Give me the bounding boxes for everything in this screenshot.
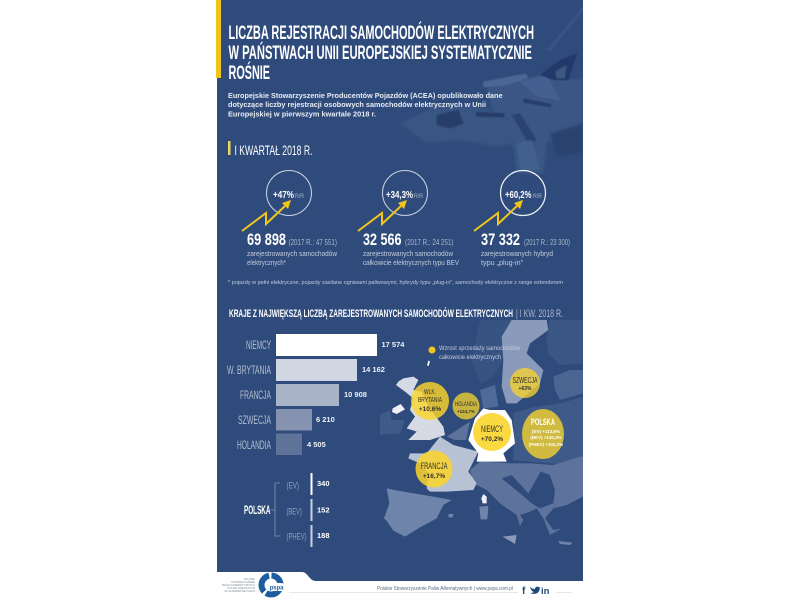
- background panel: [217, 0, 583, 600]
- bubble: Poland: (EV) +113,8%: [532, 429, 560, 434]
- poland figures: 152: [317, 506, 330, 514]
- bubble: Poland: (PHEV) +102,2%: [529, 442, 563, 447]
- logo: PSPA: [222, 576, 285, 594]
- intro text: Europejskie Stowarzyszenie Producentów Pojazdów (ACEA) opublikowało dane: [228, 91, 502, 100]
- stat: BEV: [358, 170, 459, 267]
- section heading: I kwartał: I KWARTAŁ 2018 R.: [234, 143, 312, 158]
- poland figures: (PHEV): [286, 532, 306, 542]
- intro text: Europejskiej w pierwszym kwartale 2018 r.: [228, 110, 376, 118]
- bubble: UK: BRYTANIA: [418, 395, 442, 404]
- map legend: całkowicie elektrycznych: [439, 354, 501, 361]
- bubble: France: [416, 450, 452, 488]
- bubble: Germany: [473, 413, 511, 451]
- accent bar: [216, 0, 221, 78]
- logo: PSPA: pspa: [269, 586, 284, 592]
- bubble: Sweden: +63%: [519, 386, 532, 392]
- stat: all electric: +47%: [273, 189, 295, 201]
- stat: BEV: R/R: [414, 193, 423, 200]
- bubble: UK: WLK.: [424, 387, 436, 396]
- stat: plug-in: (2017 R.: 23 300): [524, 238, 570, 247]
- logo: PSPA: POLSKIE: [244, 577, 255, 581]
- poland figures: 188: [317, 531, 330, 540]
- poland figures: (BEV): [286, 506, 302, 518]
- stat: all electric: 69 898: [247, 230, 286, 249]
- footer: [217, 572, 583, 600]
- bubble: Poland: [522, 409, 564, 459]
- title: W PAŃSTWACH UNII EUROPEJSKIEJ SYSTEMATYCZNIE: [228, 41, 532, 64]
- section heading: I kwartał: [228, 141, 312, 158]
- bubble: Germany: NIEMCY: [481, 424, 503, 435]
- map legend: Wzrost sprzedaży samochodów: [439, 345, 520, 352]
- bubble: Netherlands: [452, 392, 480, 420]
- map legend: [428, 345, 520, 361]
- bar chart: 4 505: [307, 440, 326, 449]
- bubble: UK: +10,6%: [419, 406, 441, 413]
- bar chart: [227, 334, 405, 455]
- stat: all electric: R/R: [295, 193, 304, 200]
- stat: plug-in: typu „plug-in”: [481, 260, 524, 267]
- logo: PSPA: POLISH ASSOCIATION: [227, 586, 255, 590]
- bar chart: SZWECJA: [238, 413, 271, 427]
- heading period: | I KW. 2018 R.: [516, 308, 563, 320]
- poland figures: 340: [317, 479, 330, 488]
- bubble: France: FRANCJA: [420, 461, 448, 472]
- intro text: [228, 91, 502, 118]
- bubble: UK: [411, 382, 449, 420]
- social icons: in: [541, 586, 550, 597]
- bar chart: 10 908: [344, 390, 367, 399]
- social icons: f: [522, 586, 526, 597]
- title: LICZBA REJESTRACJI SAMOCHODÓW ELEKTRYCZNYCH: [228, 20, 534, 44]
- bubble: Poland: POLSKA: [531, 417, 555, 427]
- background photo: charging plug: [400, 7, 583, 173]
- bubble: Netherlands: HOLANDIA: [455, 401, 477, 408]
- stat: BEV: 32 566: [363, 230, 402, 249]
- logo: PSPA: OF ALTERNATIVE FUELS: [224, 589, 255, 593]
- bubble: Netherlands: +124,7%: [457, 409, 475, 414]
- footnote: * pojazdy w pełni elektryczne, pojazdy zasilane ogniwami paliwowymi, hybrydy typu „plug-in”, samochody elektryczne z range extenderem: [228, 280, 563, 286]
- northern europe: [380, 320, 583, 465]
- stat: plug-in: [474, 170, 570, 267]
- bubble: Sweden: [510, 368, 540, 398]
- bar chart: NIEMCY: [246, 338, 271, 352]
- stat: BEV: +34,3%: [386, 189, 413, 201]
- stat: plug-in: zarejestrowanych hybryd: [481, 251, 553, 258]
- title: ROŚNIE: [228, 60, 270, 84]
- bubble: Germany: +70,2%: [481, 436, 503, 443]
- stat: all electric: (2017 R.: 47 551): [288, 238, 337, 247]
- bar chart: 6 210: [316, 415, 335, 424]
- bar chart: 14 162: [362, 365, 385, 374]
- stat: BEV: (2017 R.: 24 251): [405, 238, 454, 247]
- logo: PSPA: PALIW ALTERNATYWNYCH: [222, 583, 255, 587]
- stat: plug-in: +60,2%: [505, 189, 532, 201]
- stat: all electric: zarejestrowanych samochodów: [247, 251, 338, 258]
- title: [228, 20, 534, 84]
- bar chart: HOLANDIA: [237, 438, 271, 452]
- bar chart: W. BRYTANIA: [227, 363, 271, 377]
- poland figures: POLSKA: [244, 503, 271, 517]
- logo: PSPA: STOWARZYSZENIE: [231, 580, 255, 584]
- europe map: [380, 320, 583, 545]
- bar chart: FRANCJA: [240, 388, 271, 402]
- intro text: dotyczące liczby rejestracji osobowych samochodów elektrycznych w Unii: [228, 100, 486, 109]
- poland figures: (EV): [286, 480, 299, 492]
- section heading: countries: KRAJE Z NAJWIĘKSZĄ LICZBĄ ZAREJESTROWANYCH SAMOCHODÓW ELEKTRYCZNYCH: [229, 307, 513, 320]
- stat: plug-in: 37 332: [481, 230, 520, 249]
- stat: BEV: zarejestrowanych samochodów: [363, 251, 454, 258]
- bubble: Poland: (BEV) +130,3%: [530, 435, 562, 440]
- bubble: Sweden: SZWECJA: [512, 376, 538, 385]
- stat: all electric: elektrycznych*: [247, 260, 286, 267]
- stat: BEV: całkowicie elektrycznych typu BEV: [363, 260, 459, 267]
- bubble: France: +16,7%: [423, 473, 445, 480]
- social icons: [522, 586, 550, 597]
- poland figures: [244, 473, 330, 547]
- southern europe: [384, 408, 583, 545]
- footer: Polskie Stowarzyszenie Paliw Alternatywnych | www.pspa.com.pl: [377, 586, 513, 592]
- stat: all electric: [242, 170, 338, 267]
- bar chart: 17 574: [382, 340, 405, 349]
- stat: plug-in: R/R: [533, 193, 542, 200]
